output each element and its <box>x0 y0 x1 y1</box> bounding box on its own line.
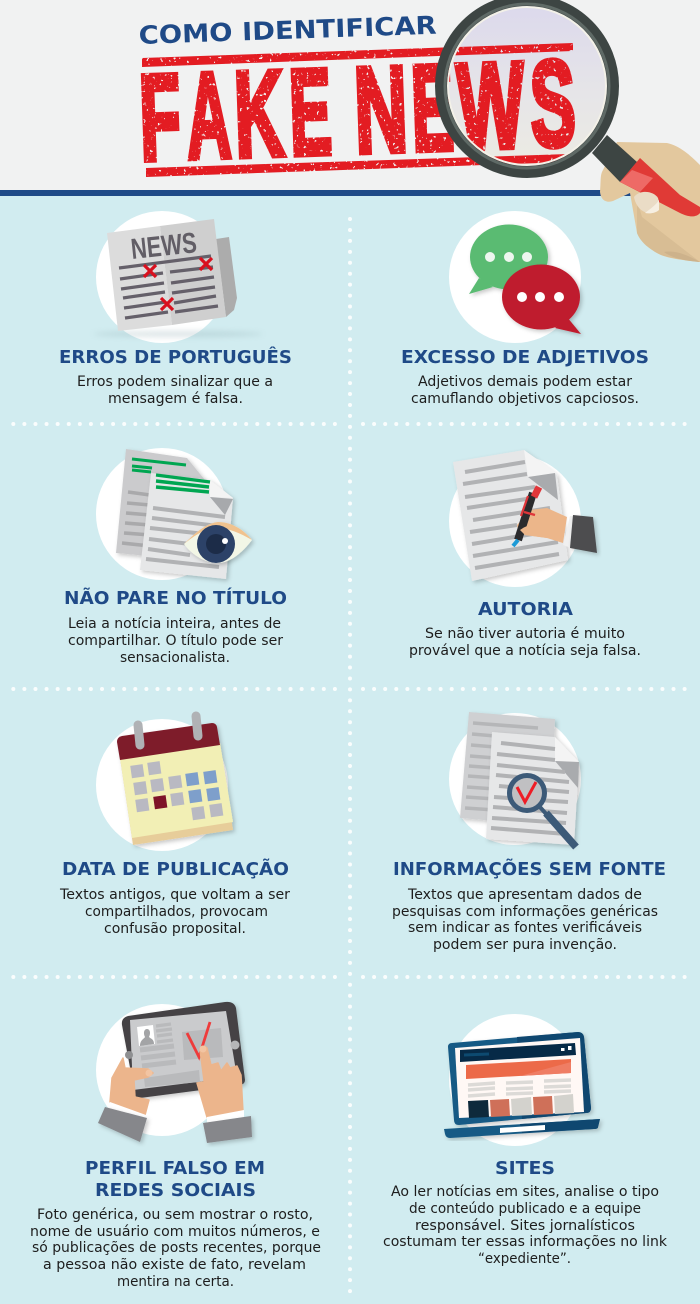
text block <box>392 887 658 953</box>
panel: informações sem fonte <box>392 712 666 953</box>
text block <box>59 887 290 937</box>
heading: ERROS DE PORTUGUÊS <box>59 346 292 368</box>
text block <box>411 374 639 407</box>
icon: documents and eye <box>96 448 252 580</box>
panel: perfil falso em redes sociais <box>30 1002 321 1290</box>
text block: “expediente”. <box>478 1251 571 1267</box>
text block: confusão proposital. <box>104 921 246 937</box>
text block: Textos antigos, que voltam a ser <box>59 887 290 903</box>
icon: documents with magnifier <box>449 712 581 847</box>
title: como identificar: COMO IDENTIFICAR <box>138 11 437 50</box>
stamp: fake news: K <box>232 45 286 183</box>
icon: newspaper <box>93 211 263 343</box>
text block: só publicações de posts recentes, porque <box>32 1240 321 1256</box>
stamp: fake news: W <box>455 37 527 175</box>
text block <box>77 374 273 407</box>
text block: podem ser pura invenção. <box>433 937 617 953</box>
stamp: fake news: F <box>137 49 183 186</box>
icon: speech bubbles <box>449 211 581 343</box>
text block: de conteúdo publicado e a equipe <box>409 1201 641 1217</box>
icon: tablet with hands <box>96 1002 252 1143</box>
panel: erros de português <box>59 211 292 407</box>
text block: sensacionalista. <box>120 650 230 666</box>
text block <box>383 1184 668 1267</box>
text block <box>409 626 641 659</box>
icon: document with writing hand <box>449 450 597 587</box>
heading: NÃO PARE NO TÍTULO <box>64 586 287 609</box>
heading: SITES <box>495 1158 555 1179</box>
icon: newspaper: NEWS <box>129 227 198 266</box>
text block: camuflando objetivos capciosos. <box>411 391 639 407</box>
icon: calendar <box>96 716 233 851</box>
text block: nome de usuário com muitos números, e <box>30 1224 320 1240</box>
text block: sem indicar as fontes verificáveis <box>408 920 642 936</box>
text block: pesquisas com informações genéricas <box>392 904 658 920</box>
panel: excesso de adjetivos <box>401 211 649 407</box>
text block <box>68 616 283 666</box>
heading <box>85 1158 265 1201</box>
text block: Leia a notícia inteira, antes de <box>68 616 281 632</box>
heading: DATA DE PUBLICAÇÃO <box>62 857 289 880</box>
heading: AUTORIA <box>478 599 573 620</box>
text block: Adjetivos demais podem estar <box>418 374 632 390</box>
stamp: fake news: N <box>352 41 410 179</box>
header: title with magnifying glass <box>137 0 700 262</box>
text block: Erros podem sinalizar que a <box>77 374 273 390</box>
text block: mensagem é falsa. <box>108 391 243 407</box>
stamp: fake news: S <box>528 35 578 172</box>
panel: autoria <box>409 450 641 659</box>
text block: a pessoa não existe de fato, revelam <box>43 1257 306 1273</box>
panel: não pare no título <box>64 448 287 666</box>
text block: Se não tiver autoria é muito <box>425 626 625 642</box>
heading: INFORMAÇÕES SEM FONTE <box>393 857 666 880</box>
icon: laptop <box>444 1014 600 1146</box>
text block: provável que a notícia seja falsa. <box>409 643 641 659</box>
stamp: fake news: E <box>287 43 334 181</box>
panel: data de publicação <box>59 716 290 937</box>
stamp: fake news: E <box>409 39 456 177</box>
text block: compartilhar. O título pode ser <box>68 633 283 649</box>
heading: PERFIL FALSO EM <box>85 1158 265 1179</box>
text block: costumam ter essas informações no link <box>383 1234 668 1250</box>
text block: Textos que apresentam dados de <box>407 887 642 903</box>
heading: REDES SOCIAIS <box>95 1180 256 1201</box>
panel: sites <box>383 1014 668 1267</box>
text block: compartilhados, provocam <box>85 904 268 920</box>
text block: Foto genérica, ou sem mostrar o rosto, <box>37 1207 313 1223</box>
text block <box>30 1207 321 1290</box>
text block: mentira na certa. <box>117 1274 234 1290</box>
text block: responsável. Sites jornalísticos <box>415 1218 635 1234</box>
stamp: fake news: A <box>184 47 233 184</box>
glass lens <box>447 6 607 166</box>
icon: magnifying glass and hand <box>441 0 700 262</box>
heading: EXCESSO DE ADJETIVOS <box>401 347 649 368</box>
stamp: fake news <box>137 35 578 186</box>
text block: Ao ler notícias em sites, analise o tipo <box>391 1184 659 1200</box>
